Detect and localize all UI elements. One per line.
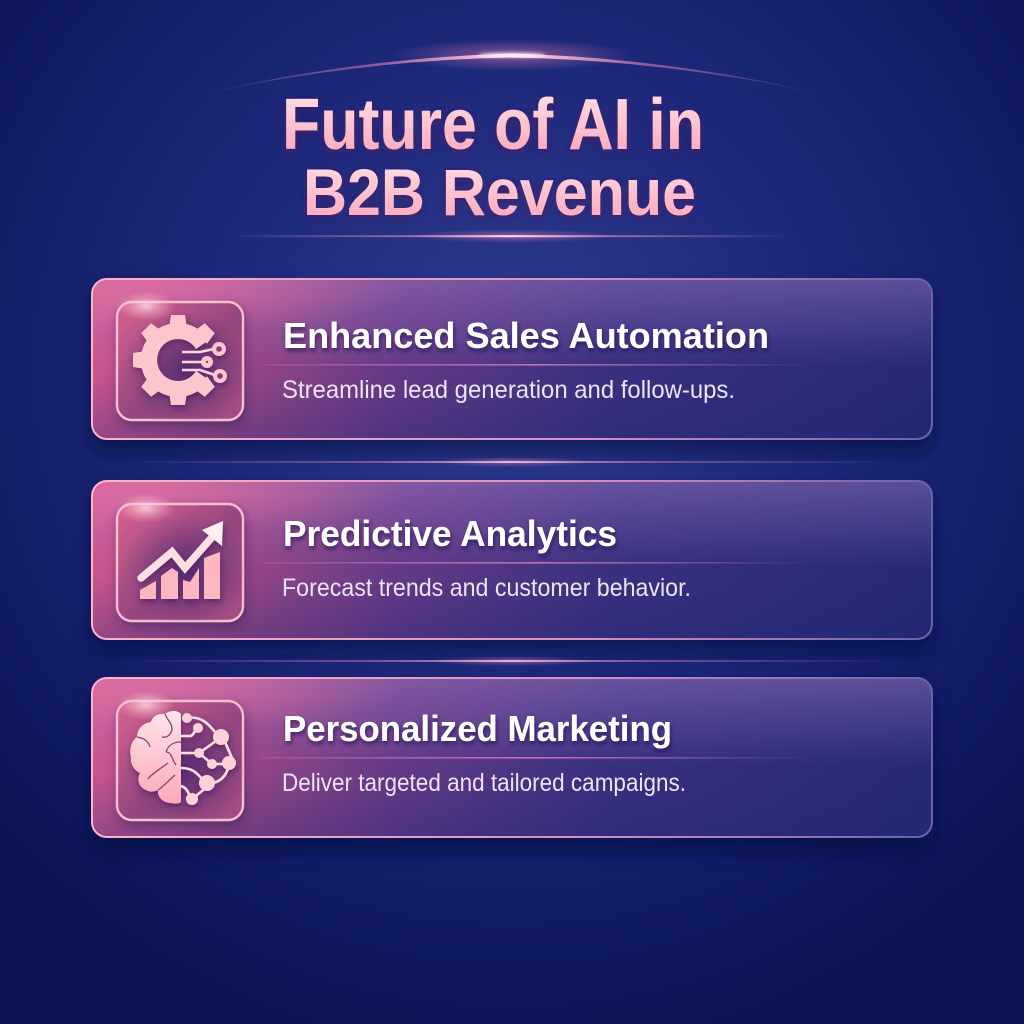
separator [125,457,895,467]
top glowing arc [190,39,835,97]
divider [262,364,812,366]
description: Forecast trends and customer behavior. [282,574,691,602]
panel body [92,678,932,837]
icon tile: gear with circuits [116,291,243,420]
title: B2B Revenue [303,155,696,229]
separator [125,656,895,666]
heading: Predictive Analytics [283,513,617,554]
title underline glow [230,229,790,243]
panel: Predictive Analytics [91,481,933,654]
description: Deliver targeted and tailored campaigns. [282,769,686,797]
divider [262,562,812,564]
heading: Personalized Marketing [283,708,672,749]
panel: Enhanced Sales Automation [91,279,933,454]
icon tile: growth chart [116,493,243,621]
panel body [92,481,932,639]
description: Streamline lead generation and follow-ups. [282,376,735,404]
heading: Enhanced Sales Automation [283,315,769,356]
icon tile: brain network [116,690,243,820]
title: Future of AI in [282,85,704,165]
panel: Personalized Marketing [91,678,933,853]
divider [262,757,812,759]
panel body [92,279,932,439]
title [282,85,704,229]
